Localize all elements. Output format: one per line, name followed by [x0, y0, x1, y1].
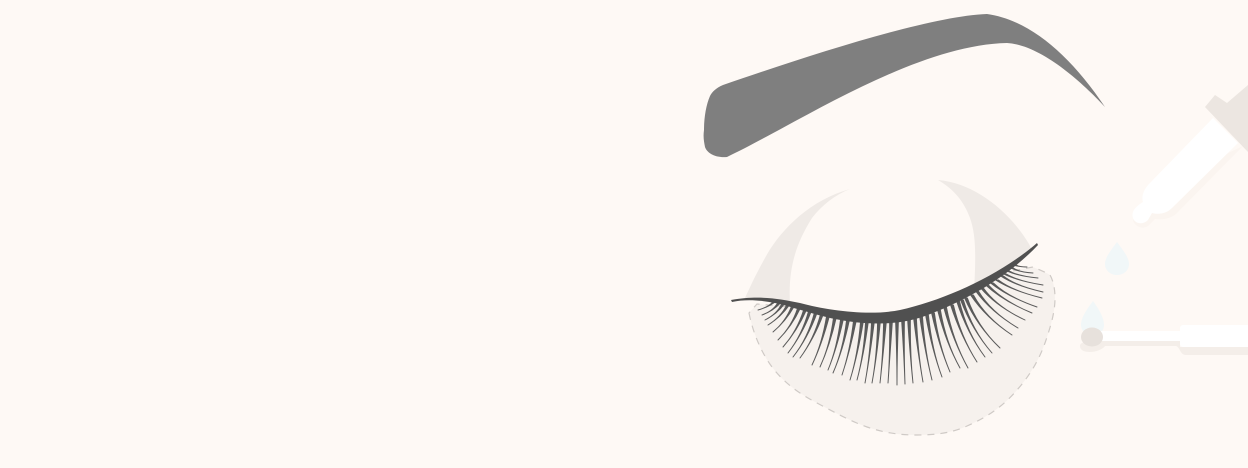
icon: dropper: [1132, 85, 1248, 228]
swab stick: [1100, 331, 1184, 341]
icon: cotton swab: [1080, 325, 1248, 355]
icon: upper lash line: [731, 243, 1038, 324]
icon: eyelashes: [758, 265, 1043, 385]
dropper cap: [1205, 85, 1248, 152]
swab tip: [1081, 328, 1103, 346]
icon: left eyelid crescent: [745, 189, 850, 304]
icon: right eyelid crescent: [938, 180, 1032, 292]
icon: under-eye patch: [749, 267, 1055, 435]
dropper body: [1132, 118, 1238, 223]
swab shadow: [1080, 341, 1248, 355]
icon: upper drop: [1105, 242, 1129, 275]
icon: lower drop: [1081, 301, 1104, 336]
dropper shadow: [1133, 146, 1243, 228]
icon: eyebrow: [704, 14, 1105, 157]
swab handle: [1180, 325, 1248, 347]
